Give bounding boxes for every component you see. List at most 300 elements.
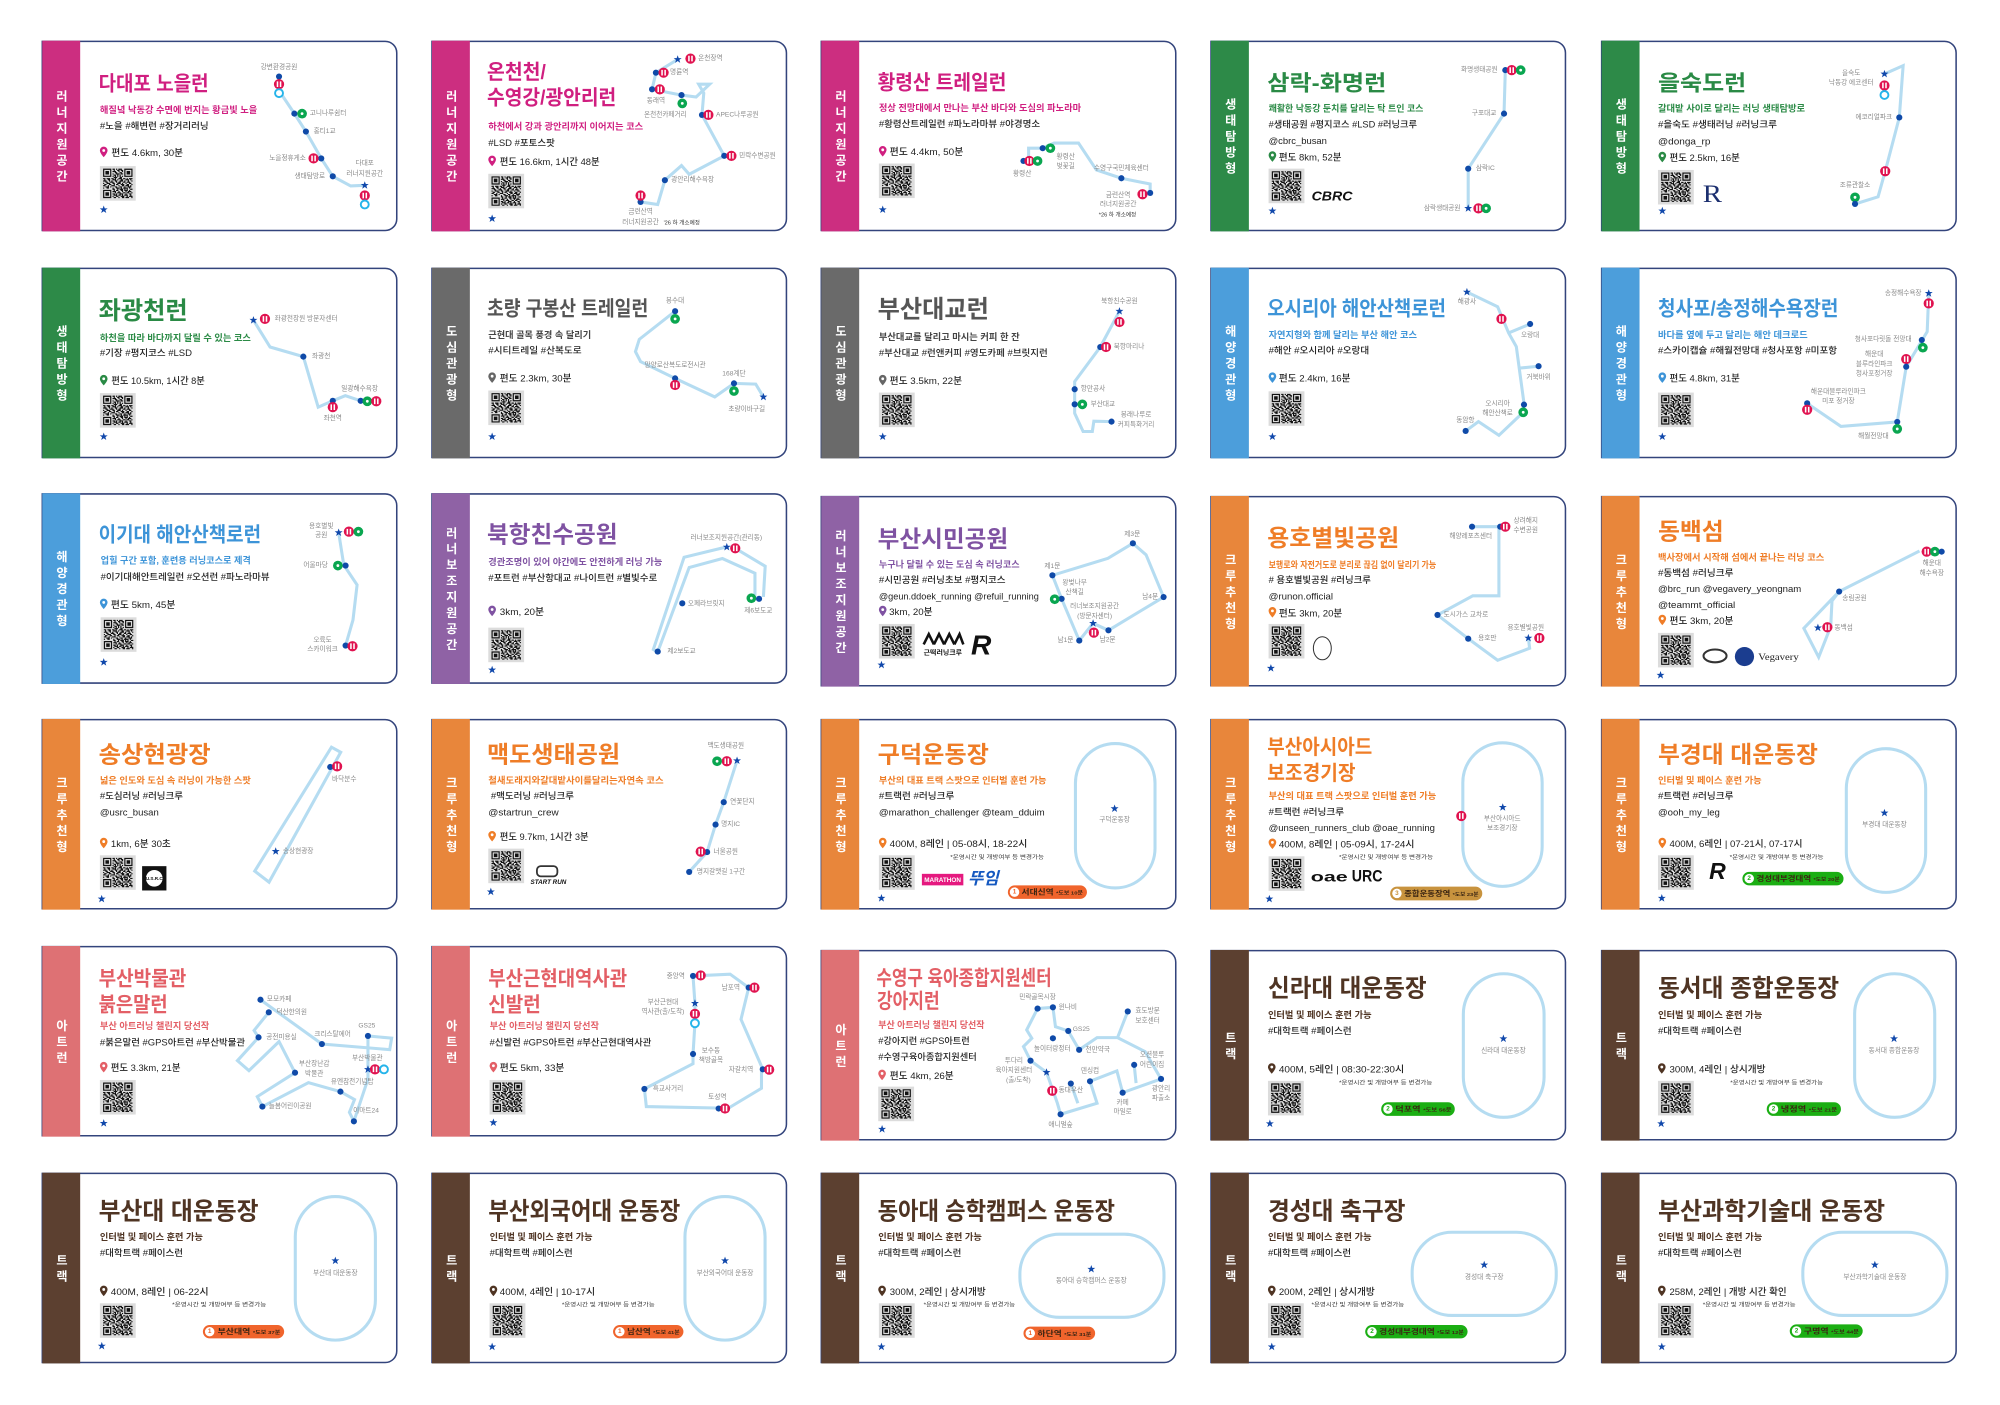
route map: 부산대교 — [1091, 399, 1115, 408]
route map: 구포대교 — [1472, 109, 1496, 117]
track map: 신라대 대운동장 — [1481, 1046, 1526, 1055]
QR code — [1268, 1081, 1304, 1115]
panel: 부경대 대운동장 — [1602, 719, 1956, 910]
subtitle: 철새도래지와갈대밭사이를달리는자연속 코스 — [488, 774, 664, 785]
route map: 청사포다릿돌 전망대 — [1855, 334, 1912, 343]
heading: 부산과학기술대 운동장 — [1658, 1198, 1885, 1225]
distance: 편도 3.3km, 21분 — [111, 1063, 181, 1074]
QR code — [1658, 170, 1694, 204]
subtitle: 인터벌 및 페이스 훈련 가능 — [878, 1231, 982, 1242]
hashtags — [1658, 790, 1733, 817]
station pill — [1381, 1102, 1455, 1116]
card frame — [1602, 951, 1956, 1140]
category strip — [821, 496, 859, 687]
distance: 300M, 2레인 | 상시개방 — [890, 1286, 986, 1298]
route map: 오랑대 — [1521, 331, 1539, 339]
category strip — [1211, 268, 1249, 458]
distance: 200M, 2레인 | 상시개방 — [1279, 1286, 1375, 1298]
station pill: 남산역 *도보 41분 — [627, 1327, 680, 1336]
distance: 편도 2.4km, 16분 — [1279, 374, 1351, 385]
category strip — [1602, 1173, 1640, 1363]
logo: RP: R — [1703, 179, 1723, 208]
route map: 항만공사 — [1081, 384, 1105, 393]
category strip — [432, 268, 470, 458]
track map: 구덕운동장 — [1099, 815, 1130, 824]
panel: 좌광천런 — [42, 268, 397, 458]
panel: 삼락-화명런 — [1211, 41, 1565, 231]
hashtags — [488, 790, 574, 817]
category strip — [42, 493, 80, 684]
route map: 공원 — [315, 530, 327, 539]
station pill: 종합운동장역 *도보 23분 — [1404, 889, 1479, 898]
logo: R: R — [971, 630, 992, 661]
route map: 황령산 — [1013, 168, 1031, 177]
QR code — [879, 624, 915, 658]
route map: 제2보도교 — [667, 647, 696, 655]
distance: 편도 4.4km, 50분 — [890, 147, 964, 158]
route map: 공전미용실 — [266, 1032, 297, 1041]
logos: crews: oae — [1311, 869, 1348, 885]
route map: 송정해수욕장 — [1885, 288, 1922, 297]
route map: 러너지원공간 — [1100, 199, 1137, 208]
panel: 맥도생태공원 — [432, 719, 786, 910]
panel: 다대포 노을런 — [42, 41, 397, 231]
station pill: 경성대부경대역 *도보 20분 — [1756, 874, 1840, 883]
QR code — [1658, 1081, 1694, 1115]
hashtags — [878, 1035, 977, 1062]
route map: 이마트24 — [353, 1106, 379, 1115]
route map — [996, 992, 1170, 1128]
route map — [303, 521, 363, 653]
distance: 편도 9.7km, 1시간 3분 — [500, 832, 589, 843]
route map: 강변환경공원 — [261, 62, 297, 71]
route map: 남2문 — [1100, 634, 1116, 643]
heading: 수영강/광안리런 — [487, 87, 616, 110]
category strip: 아트런 — [444, 1019, 458, 1067]
card frame — [42, 947, 397, 1136]
QR code — [1658, 855, 1694, 890]
QR code — [490, 1080, 525, 1115]
panel: 부산대교런 — [821, 268, 1176, 458]
route map — [1013, 143, 1153, 219]
route map: 놀이터랑정터 — [1034, 1043, 1071, 1052]
route map: 송상현광장 — [283, 846, 313, 855]
panel: 온천천/수영강/광안리런 — [432, 41, 786, 231]
category strip — [432, 1173, 470, 1363]
route map: 남포역 — [722, 982, 740, 991]
note: *운영시간 및 개방여부 등 변경가능 — [1730, 853, 1824, 861]
icon: star — [877, 894, 885, 902]
card frame — [42, 720, 397, 909]
hashtags: @usrc_busan — [100, 807, 159, 817]
route map: 토성역 — [708, 1092, 727, 1101]
route map: 애니멀숲 — [1048, 1119, 1073, 1128]
heading — [488, 968, 627, 1016]
route map: 덴싱컵 — [1081, 1065, 1099, 1074]
heading: 황령산 트레일런 — [878, 71, 1006, 94]
hashtags: @cbrc_busan — [1269, 136, 1327, 146]
card frame — [1211, 1173, 1565, 1363]
subtitle: 부산의 대표 트랙 스팟으로 인터벌 훈련 가능 — [1269, 790, 1436, 801]
route map: 좌천역 — [324, 413, 342, 422]
distance: 편도 5km, 33분 — [500, 1063, 565, 1074]
route map: 도시가스 교차로 — [1444, 609, 1488, 618]
category strip: 생태탐방형 — [54, 325, 68, 405]
track map: 부산과학기술대 운동장 — [1843, 1272, 1906, 1281]
route map: 러너보조지원공간(관리동) — [690, 533, 762, 542]
hashtags — [1658, 567, 1801, 610]
icon: star — [100, 1119, 108, 1127]
route map: 흑교사거리 — [653, 1083, 683, 1092]
distance: 300M, 4레인 | 상시개방 — [1669, 1063, 1766, 1075]
QR code — [1269, 169, 1304, 203]
QR code — [1658, 633, 1694, 667]
subtitle: 업힐 구간 포함, 훈련용 러닝코스로 제격 — [101, 555, 251, 566]
heading: 청사포/송정해수욕장런 — [1658, 298, 1838, 321]
panel: 황령산 트레일런 — [821, 41, 1176, 231]
route map: 광안리 — [1152, 1083, 1170, 1092]
subtitle: 쾌활한 낙동강 둔치를 달리는 탁 트인 코스 — [1269, 103, 1423, 114]
logos: crews — [922, 869, 1000, 888]
route map: 명지IC — [721, 819, 740, 828]
heading: 보조경기장 — [1267, 762, 1356, 785]
category strip: 크루추천형 — [1614, 776, 1628, 856]
route map: 금련산역 — [628, 207, 653, 216]
subtitle: 하천을 따라 바다까지 달릴 수 있는 코스 — [100, 332, 251, 343]
icon: star — [1658, 433, 1666, 440]
category strip — [1602, 268, 1640, 458]
hashtags: #동백섬 #러닝크루 — [1658, 567, 1733, 578]
distance: 편도 3km, 20분 — [1669, 616, 1734, 627]
logos: crews: Vegavery — [1758, 652, 1799, 662]
category strip — [432, 41, 470, 231]
hashtags: #대학트랙 #페이스런 — [1268, 1025, 1352, 1036]
category strip — [1211, 41, 1249, 231]
route map: 연꽃단지 — [730, 797, 755, 806]
logo: 근떡러닝크루 — [924, 634, 963, 657]
distance: 편도 8km, 52분 — [1279, 152, 1342, 163]
subtitle: 인터벌 및 페이스 훈련 가능 — [100, 1231, 203, 1242]
card frame — [821, 720, 1176, 909]
distance: 400M, 8레인 | 05-08시, 18-22시 — [890, 839, 1027, 850]
route map: 투다리 — [1005, 1055, 1023, 1064]
panel: 용호별빛공원 — [1211, 496, 1565, 687]
logo: 런온 — [1313, 637, 1331, 660]
track map: 보조경기장 — [1487, 823, 1518, 832]
track map — [1846, 749, 1926, 892]
distance: 편도 3.5km, 22분 — [890, 376, 962, 387]
route map: 해운대 — [1923, 558, 1941, 567]
station pill: 3 — [1395, 890, 1399, 897]
icon: star — [1658, 207, 1666, 214]
panel: 송상현광장 — [42, 719, 397, 910]
category strip — [821, 719, 859, 910]
hashtags: #시티트레일 #산복도로 — [488, 344, 582, 355]
heading: 구덕운동장 — [878, 742, 989, 768]
note: *운영시간 및 개방여부 등 변경가능 — [1703, 1300, 1796, 1308]
subtitle: 해질녘 낙동강 수면에 번지는 황금빛 노을 — [100, 104, 257, 115]
heading — [487, 61, 616, 110]
icon: star — [98, 1342, 106, 1349]
QR code — [100, 1080, 136, 1115]
hashtags: #대학트랙 #페이스런 — [1658, 1247, 1742, 1258]
route map: 파출소 — [1152, 1093, 1170, 1102]
category strip — [1211, 1173, 1249, 1363]
track map: 부경대 대운동장 — [1862, 820, 1907, 829]
subtitle: 부산 아트러닝 챌린지 당선작 — [100, 1020, 209, 1031]
distance — [488, 606, 544, 618]
category strip: 러너지원공간 — [444, 90, 458, 186]
route map: 해광사 — [1458, 297, 1476, 306]
hashtags: #포트런 #부산항대교 #나이트런 #별빛수로 — [488, 572, 657, 583]
panel: 신라대 대운동장 — [1211, 950, 1565, 1141]
route map — [641, 970, 774, 1114]
icon: star — [877, 661, 885, 668]
route map: 보수동 — [702, 1046, 720, 1054]
track map: 동아대 승학캠퍼스 운동장 — [1056, 1276, 1127, 1285]
hashtags: @ooh_my_leg — [1658, 807, 1720, 817]
route map: 168계단 — [722, 368, 746, 377]
card frame — [42, 494, 397, 683]
heading: 경성대 축구장 — [1268, 1198, 1406, 1225]
hashtags: @startrun_crew — [488, 807, 559, 817]
station pill: 2 — [1772, 1106, 1776, 1113]
category strip — [432, 946, 470, 1137]
route map: 맥도생태공원 — [707, 740, 744, 749]
subtitle: 넓은 인도와 도심 속 러닝이 가능한 스팟 — [100, 774, 251, 785]
track map — [1075, 744, 1155, 888]
QR code — [1269, 391, 1304, 426]
route map: 북항친수공원 — [1101, 296, 1138, 305]
category strip — [42, 1173, 80, 1363]
subtitle: 근현대 골목 풍경 속 달리기 — [488, 329, 591, 340]
hashtags: #시민공원 #러닝초보 #평지코스 — [879, 574, 1006, 585]
logo: CBRC: CBRC — [1312, 189, 1353, 204]
category strip: 크루추천형 — [1223, 776, 1237, 856]
station pill: 1 — [1028, 1330, 1032, 1337]
note: *운영시간 및 개방여부 등 변경가능 — [1339, 853, 1433, 861]
icon: star — [1266, 1120, 1274, 1127]
station pill — [1742, 872, 1844, 885]
category strip: 크루추천형 — [1614, 553, 1628, 633]
category strip: 러너지원공간 — [833, 90, 847, 186]
heading: 부산대 대운동장 — [99, 1198, 259, 1225]
route map: 육아지원센터 — [996, 1065, 1032, 1074]
heading: 오시리아 해안산책로런 — [1267, 298, 1446, 321]
distance: 편도 4km, 26분 — [890, 1071, 954, 1082]
route map: 동암항 — [1456, 415, 1475, 424]
category strip: 도심관광형 — [833, 325, 847, 405]
category strip: 크루추천형 — [1223, 553, 1237, 633]
route map: 청사포정거장 — [1856, 368, 1893, 377]
route map: 효도방문 — [1135, 1006, 1160, 1015]
hashtags: # 용호별빛공원 #러닝크루 — [1269, 574, 1371, 585]
station pill: 냉정역 *도보 21분 — [1781, 1105, 1838, 1114]
category strip — [1602, 950, 1640, 1141]
route map — [261, 62, 383, 208]
route map: 민락골목시장 — [1019, 992, 1056, 1001]
station pill: 덕포역 *도보 56분 — [1395, 1105, 1452, 1114]
route map: 박물관 — [305, 1068, 323, 1077]
QR code — [488, 628, 524, 662]
icon: star — [1658, 894, 1666, 902]
route map: GS25 — [358, 1023, 376, 1030]
logos: crews: 뚜임 — [968, 869, 1000, 888]
route map: 봉래나루로 — [1121, 409, 1151, 418]
icon: star — [877, 1343, 885, 1350]
route map: 동대우산 — [1059, 1085, 1083, 1094]
category strip — [42, 268, 80, 458]
QR code — [100, 855, 136, 890]
subtitle: 바다를 옆에 두고 달리는 해안 데크로드 — [1658, 329, 1808, 340]
hashtags: @marathon_challenger @team_dduim — [879, 807, 1045, 817]
route map: 산책길 — [1065, 587, 1084, 596]
route map: 커피특화거리 — [1118, 420, 1154, 429]
QR code — [1269, 856, 1304, 891]
route map: 해안산책로 — [1482, 408, 1513, 417]
route map: 명륜역 — [670, 67, 688, 76]
category strip — [432, 719, 470, 910]
route map: 바닥분수 — [332, 774, 357, 783]
route map: '26 하 개소예정 — [664, 218, 700, 226]
route map: 황령산 — [1057, 152, 1075, 161]
route map: 생태탐방로 — [295, 171, 325, 180]
heading: 송상현광장 — [99, 742, 211, 768]
station pill: 경성대부경대역 *도보 12분 — [1379, 1327, 1464, 1336]
category strip: 생태탐방형 — [1223, 98, 1237, 178]
hashtags: #강아지런 #GPS아트런 — [878, 1035, 970, 1046]
icon: star — [1265, 895, 1273, 902]
subtitle: 부산대교를 달리고 마시는 커피 한 잔 — [879, 331, 1020, 342]
station pill: 서대신역 *도보 10분 — [1022, 888, 1084, 897]
route map: 온천천카페거리 — [644, 109, 687, 118]
category strip: 아트런 — [833, 1023, 847, 1071]
subtitle: 누구나 달릴 수 있는 도심 속 러닝코스 — [879, 559, 1020, 570]
route map — [635, 296, 767, 413]
hashtags: #트랙런 #러닝크루 — [1269, 806, 1344, 817]
station pill: 1 — [208, 1328, 212, 1335]
category strip — [1211, 496, 1249, 687]
route map — [249, 313, 381, 422]
QR code — [100, 166, 136, 201]
icon: star — [489, 1118, 497, 1126]
station pill: 2 — [1370, 1328, 1374, 1335]
card frame — [1602, 268, 1956, 457]
subtitle: 하천에서 강과 광안리까지 이어지는 코스 — [488, 121, 643, 132]
route map — [1072, 296, 1154, 431]
route map: 해월전망대 — [1858, 431, 1889, 440]
track map — [1463, 974, 1544, 1117]
station pill — [1365, 1325, 1468, 1338]
route map: 북항마리나 — [1114, 342, 1144, 351]
route map: 동래역 — [647, 95, 665, 104]
category strip: 러너지원공간 — [54, 90, 68, 186]
station pill: 1 — [1013, 889, 1017, 896]
QR code — [100, 1303, 136, 1338]
icon: star — [1658, 1343, 1666, 1350]
station pill — [1390, 887, 1482, 900]
note: *운영시간 및 개방여부 등 변경가능 — [1311, 1300, 1404, 1308]
category strip — [821, 1173, 859, 1363]
QR code — [488, 391, 524, 425]
card frame — [432, 268, 786, 457]
card frame — [821, 951, 1176, 1140]
heading: 강아지런 — [877, 990, 940, 1013]
category strip: 트랙 — [444, 1254, 458, 1286]
heading: 부산아시아드 — [1267, 736, 1372, 759]
panel: 부산아시아드 보조경기장 — [1211, 719, 1565, 910]
heading: 맥도생태공원 — [487, 742, 620, 768]
category strip: 생태탐방형 — [1614, 98, 1628, 178]
panel: 부산시민공원 — [821, 496, 1176, 687]
QR code — [488, 174, 524, 208]
route map: 노을정휴게소 — [269, 153, 306, 162]
panel: 부산박물관 붉은말런 — [42, 946, 397, 1137]
hashtags: #스카이캡슐 #해월전망대 #청사포항 #미포항 — [1658, 344, 1837, 355]
route map: 모모카페 — [267, 994, 291, 1003]
route map: 명지갈맷길 1구간 — [697, 866, 745, 875]
track map — [685, 1197, 765, 1340]
hashtags — [1269, 574, 1371, 602]
card frame — [1602, 1173, 1956, 1363]
subtitle: 경관조명이 있어 야간에도 안전하게 러닝 가능 — [488, 556, 662, 567]
category strip: 러너보조지원공간 — [833, 529, 847, 657]
QR code — [490, 1303, 525, 1338]
route map: 러너지원공간 — [346, 168, 383, 177]
subtitle: 정상 전망대에서 만나는 부산 바다와 도심의 파노라마 — [879, 102, 1082, 113]
station pill — [613, 1325, 683, 1338]
heading: 수영구 육아종합지원센터 — [876, 967, 1052, 990]
heading: 부산외국어대 운동장 — [488, 1198, 680, 1225]
route map: 을숙도 — [1842, 69, 1860, 77]
heading: 삼락-화명런 — [1267, 71, 1386, 96]
card frame — [42, 41, 397, 230]
category strip — [821, 950, 859, 1141]
icon: star — [878, 1125, 886, 1133]
route map: 조류관찰소 — [1840, 180, 1870, 189]
distance: 편도 4.8km, 31분 — [1669, 374, 1740, 385]
note: *운영시간 및 개방여부 등 변경가능 — [950, 853, 1044, 861]
track map: 경성대 축구장 — [1465, 1272, 1503, 1281]
QR code — [100, 393, 136, 428]
route map: 크리스탈에어 — [314, 1029, 351, 1038]
route map: 해수욕장 — [1920, 568, 1944, 577]
note: *운영시간 및 개방여부 등 변경가능 — [924, 1300, 1015, 1308]
route map: 중앙역 — [667, 971, 685, 980]
station pill: 2 — [1747, 875, 1751, 882]
route map: 자갈치역 — [729, 1065, 753, 1074]
card frame — [1602, 720, 1956, 909]
icon: star — [1267, 664, 1275, 672]
route map — [1434, 515, 1544, 660]
route map: 오륙도 — [313, 636, 332, 644]
station pill: 2 — [1386, 1106, 1390, 1113]
icon: star — [488, 214, 496, 222]
subtitle: 보행로와 자전거도로 분리로 끊김 없이 달리기 가능 — [1269, 559, 1436, 570]
route map: 좌광천 — [312, 351, 330, 360]
station pill: 부산대역 *도보 37분 — [218, 1327, 281, 1336]
panel: 수영구 육아종합지원센터 강아지런 — [821, 950, 1176, 1141]
route map: 수변공원 — [1514, 525, 1538, 534]
heading — [876, 967, 1052, 1013]
distance: 편도 5km, 45분 — [111, 600, 176, 611]
route map: *26 하 개소예정 — [1099, 211, 1136, 219]
route map — [622, 53, 776, 226]
panel: 동서대 종합운동장 — [1602, 950, 1956, 1141]
heading: 신발런 — [488, 993, 541, 1016]
route map: 책방골목 — [699, 1055, 723, 1064]
route map: 벚꽃길 — [1057, 161, 1075, 170]
